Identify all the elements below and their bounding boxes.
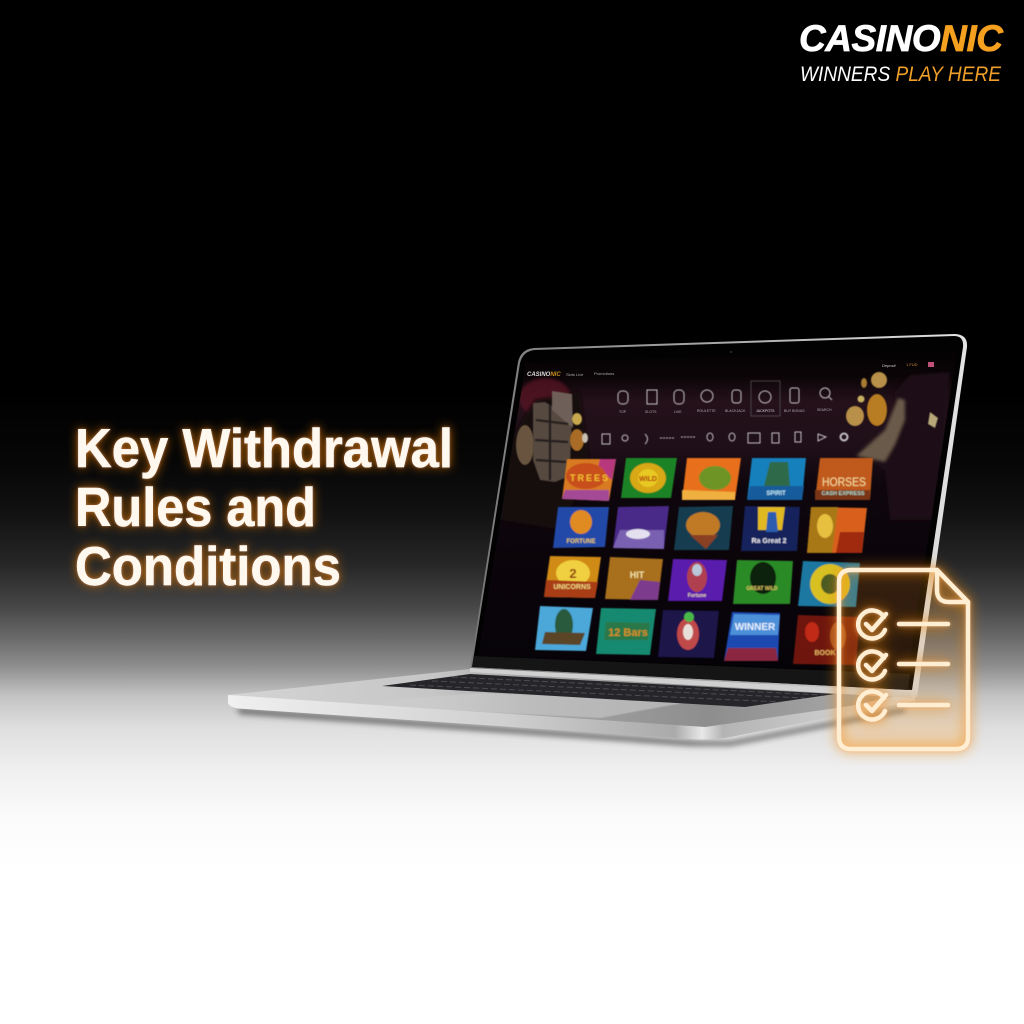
category labels: BLACKJACK <box>725 409 746 413</box>
keyboard key rows <box>410 677 822 702</box>
row 2 tiles <box>553 506 867 553</box>
logo wordmark: CASINONIC <box>799 18 1004 59</box>
row 1 tiles: TREES <box>570 473 608 483</box>
provider row <box>602 432 848 444</box>
stone totem <box>533 402 572 482</box>
category labels: LIVE <box>674 410 682 414</box>
row 2 tiles: Ra Great 2 <box>751 538 787 545</box>
shadow figure <box>500 392 590 530</box>
left coins <box>572 413 582 425</box>
logo tagline: WINNERS PLAY HERE <box>800 63 1002 86</box>
site logo: CASINONIC <box>527 372 561 378</box>
row 4 tiles: BOOK <box>814 650 836 657</box>
category labels: BUY BONUS <box>784 409 805 413</box>
gold coins <box>871 372 887 388</box>
row 4 tiles: WINNER <box>735 622 776 633</box>
game tiles <box>535 458 873 665</box>
row 3 tiles: Fortune <box>688 593 707 599</box>
site header: 1 FUD <box>906 362 918 367</box>
category labels <box>619 408 832 413</box>
checklist document icon <box>839 570 968 749</box>
keyboard <box>382 674 835 707</box>
row 3 tiles: HIT <box>630 570 645 580</box>
screen <box>478 350 957 672</box>
tan shape <box>516 425 534 465</box>
row 3 tiles: UNICORNS <box>553 584 591 591</box>
check item 3 <box>858 691 948 719</box>
category labels: JACKPOTS <box>756 409 775 413</box>
category labels: SEARCH <box>817 408 832 412</box>
title: Rules and <box>75 476 316 538</box>
row 1 tiles: CASH EXPRESS <box>821 491 865 497</box>
check item 1 <box>858 610 948 638</box>
site header: Promotions <box>594 371 614 376</box>
left hero art <box>500 378 590 530</box>
right hero art <box>846 372 950 520</box>
row 3 tiles: GREAT WILD <box>746 586 778 592</box>
site header <box>527 362 934 376</box>
base top deck <box>228 669 915 727</box>
lid silver frame <box>470 334 967 697</box>
document outline <box>839 570 968 749</box>
row 4 tiles <box>535 606 860 665</box>
page fold <box>937 570 968 602</box>
laptop base <box>228 669 915 740</box>
laptop lid <box>470 334 967 698</box>
cloaked figure <box>885 372 950 520</box>
screen backdrop <box>492 376 953 576</box>
category labels: SLOTS <box>645 410 657 414</box>
title: Key Withdrawal <box>75 417 453 479</box>
glowing outlines <box>839 570 968 749</box>
site header: Deposit <box>882 363 896 368</box>
logo <box>799 18 1004 86</box>
camera <box>730 351 732 353</box>
title <box>75 417 453 597</box>
trackpad area <box>350 693 700 718</box>
laptop base shadow <box>236 708 905 746</box>
row 3 tiles: 2 <box>569 566 577 581</box>
category labels: ROULETTE <box>697 409 716 413</box>
row 2 tiles: FORTUNE <box>566 539 596 545</box>
hinge strip <box>470 668 912 698</box>
title: Conditions <box>75 535 341 597</box>
row 1 tiles <box>562 458 873 501</box>
base front edge <box>228 692 915 740</box>
lid black bezel <box>472 336 963 690</box>
check item 2 <box>858 651 948 679</box>
row 4 tiles: 12 Bars <box>608 627 648 639</box>
row 1 tiles: HORSES <box>822 475 866 489</box>
laptop <box>228 334 967 746</box>
row 1 tiles: WILD <box>639 476 657 483</box>
category labels: TOP <box>619 410 627 414</box>
row 3 tiles <box>544 556 860 607</box>
header links: Slots Live <box>566 372 584 377</box>
red burst <box>519 376 571 412</box>
document tint <box>839 570 968 749</box>
row 1 tiles: SPIRIT <box>766 491 786 497</box>
category icon row <box>618 381 832 416</box>
